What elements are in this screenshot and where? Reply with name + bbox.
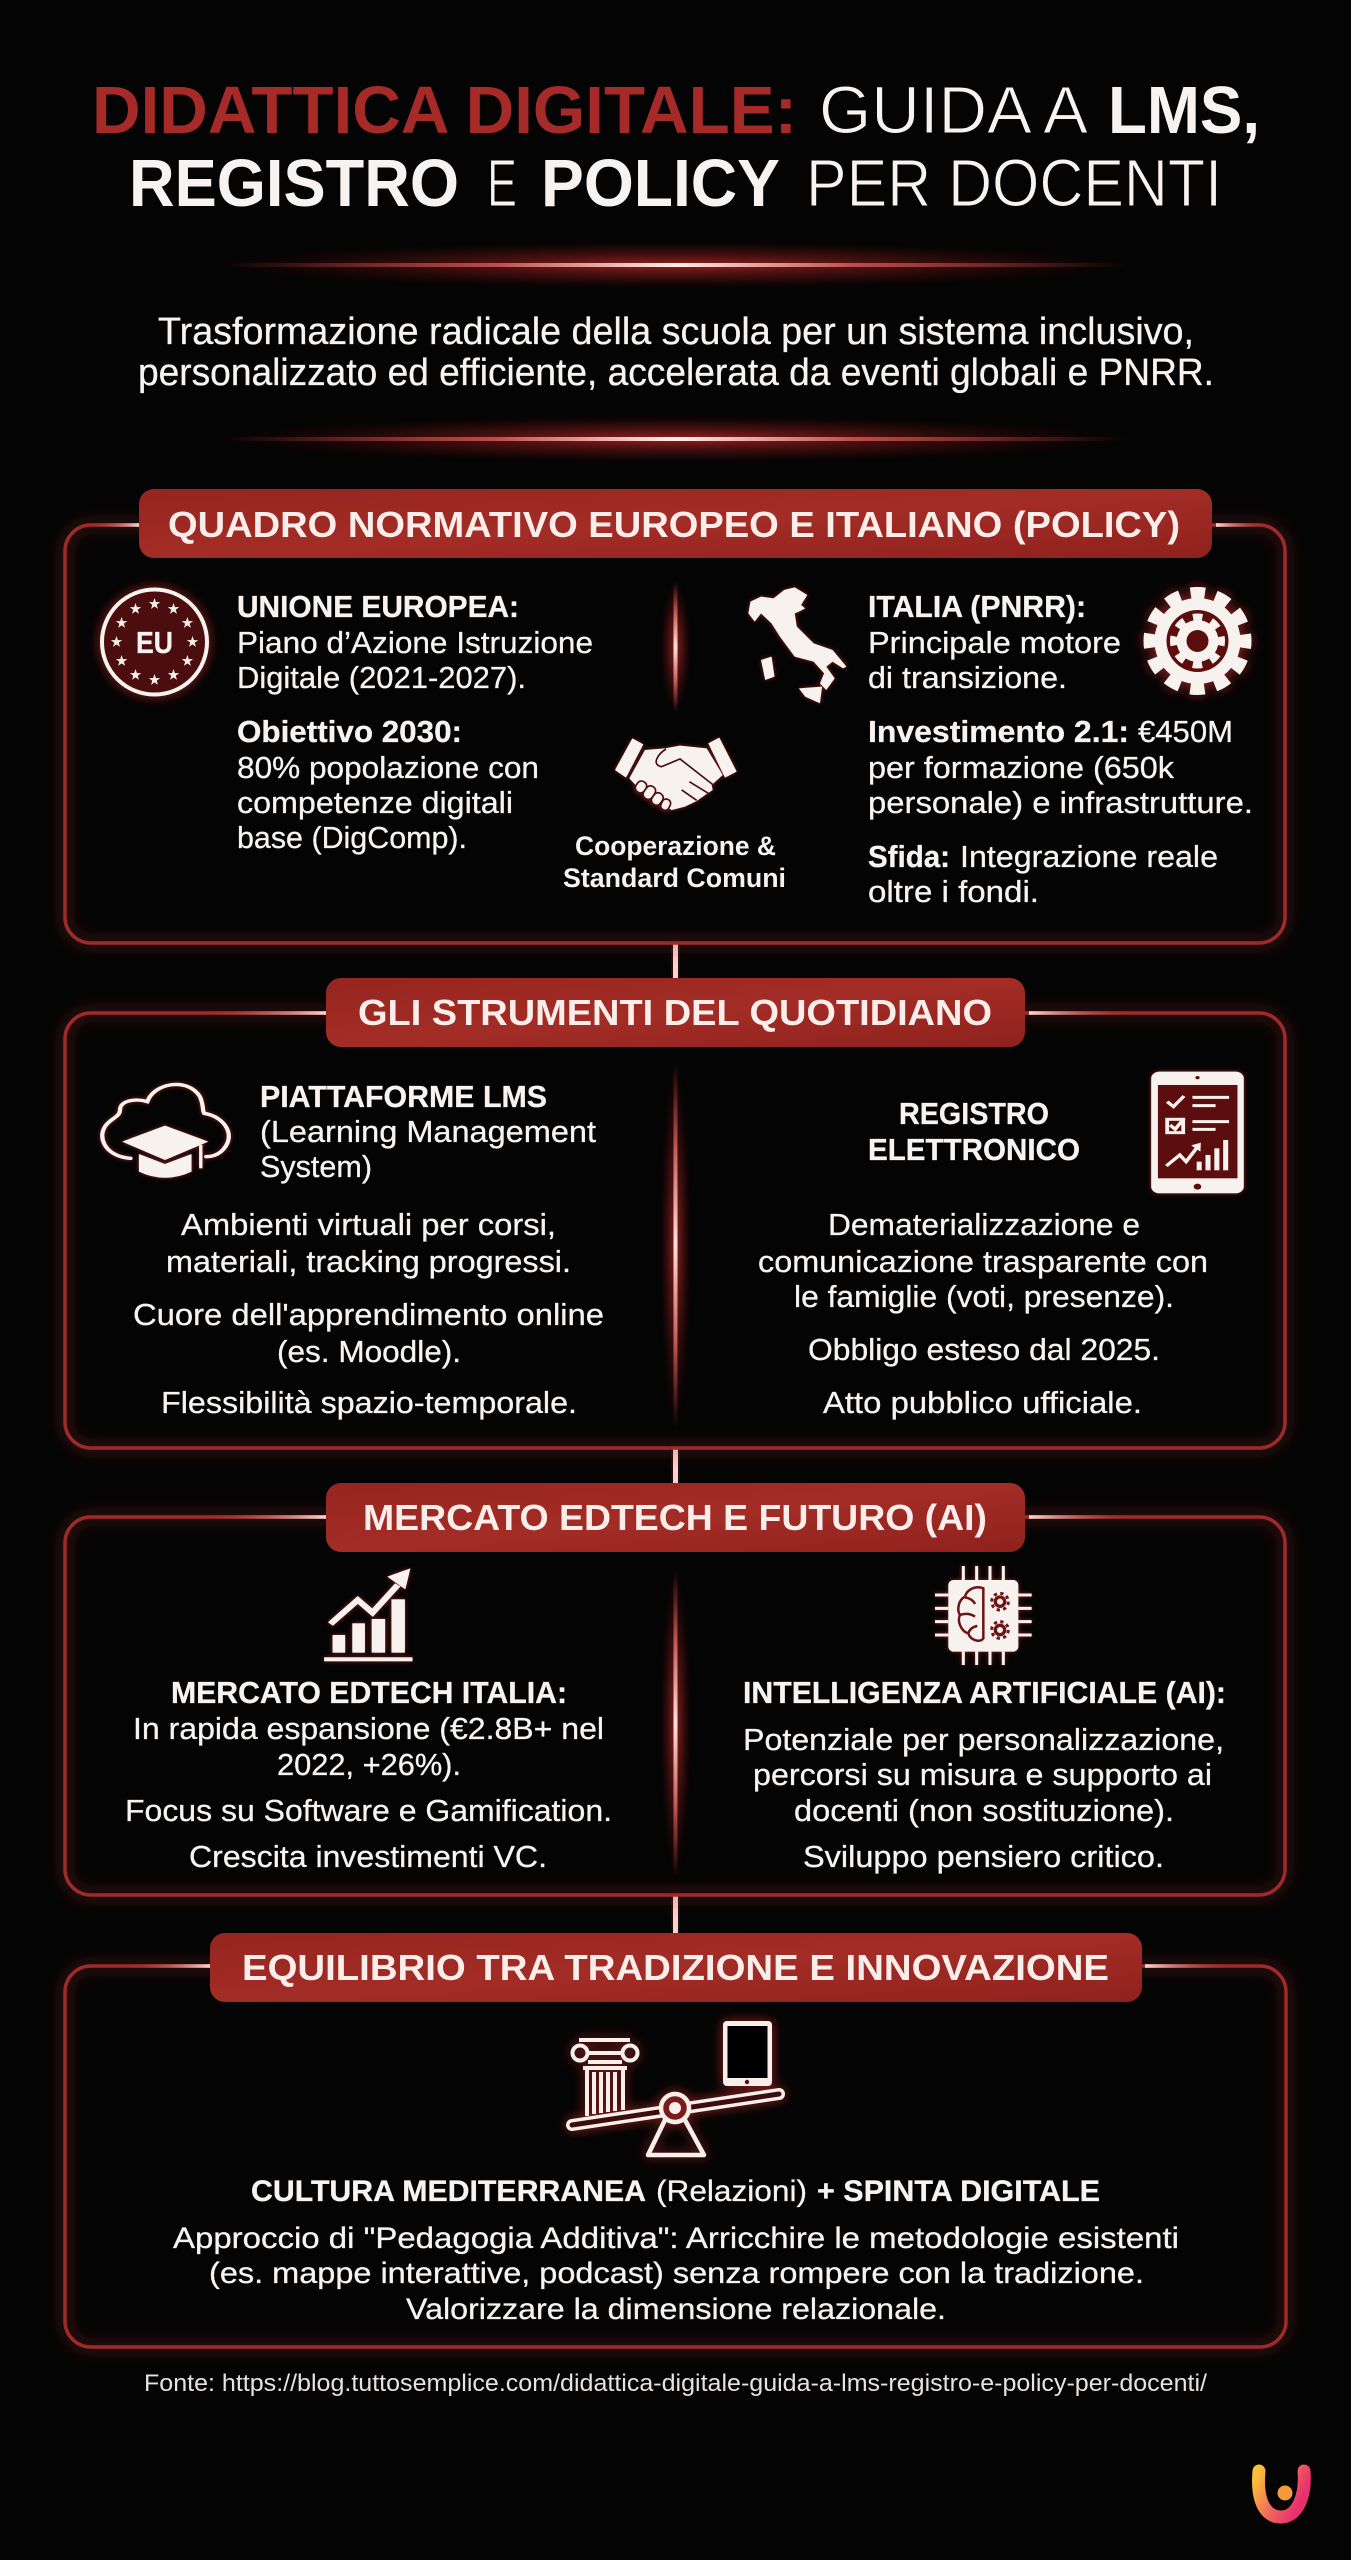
icon: cloud graduation cap [102,1084,229,1178]
text: italia pnrr: Sfida: [868,839,950,874]
text: mercato edtech italia [125,1675,612,1874]
icon: EU stars: EU [136,625,173,660]
text: mercato edtech italia: Crescita investimenti VC. [189,1839,547,1874]
title: GUIDA A [819,73,1088,148]
text: mercato edtech italia: MERCATO EDTECH ITALIA: [171,1675,567,1710]
text: italia pnrr: di transizione. [868,660,1067,695]
icon: gear [1150,594,1244,688]
heading: mercato [326,1483,1025,1552]
text: piattaforme lms: PIATTAFORME LMS [260,1079,547,1114]
text: registro elettronico: ELETTRONICO [868,1132,1080,1167]
text: unione europea: base (DigComp). [237,820,467,855]
text: registro elettronico: Atto pubblico ufficiale. [823,1385,1142,1420]
text: piattaforme lms: materiali, tracking progressi. [166,1244,571,1279]
text: registro elettronico: le famiglie (voti, presenze). [794,1279,1174,1314]
text: unione europea: 80% popolazione con [237,750,539,785]
text: piattaforme lms: System) [260,1149,372,1184]
icon: EU stars [102,590,207,694]
source: Fonte: https://blog.tuttosemplice.com/didattica-digitale-guida-a-lms-registro-e-policy-per-docenti/ [144,2370,1207,2397]
text: pedagogia additiva [173,2222,1179,2326]
icon: balance column and tablet [572,2021,779,2155]
heading: mercato: MERCATO EDTECH E FUTURO (AI) [363,1497,987,1538]
text: unione europea: Digitale (2021-2027). [237,660,526,695]
icon: italy map [748,587,846,703]
text: registro elettronico: Dematerializzazione e [828,1207,1140,1242]
text: piattaforme lms: Flessibilità spazio-temporale. [161,1385,577,1420]
text: registro elettronico: Obbligo esteso dal 2025. [808,1332,1160,1367]
heading: equilibrio [210,1933,1142,2002]
text: mercato edtech italia: 2022, +26%). [277,1747,461,1782]
panel: strumenti del quotidiano [65,978,1285,1448]
text: cultura mediterranea: + SPINTA DIGITALE [817,2175,1100,2208]
panel: quadro normativo [65,489,1285,943]
text: piattaforme lms: Ambienti virtuali per corsi, [181,1207,556,1242]
text: intelligenza artificiale: INTELLIGENZA ARTIFICIALE (AI): [743,1675,1226,1710]
text: cultura mediterranea: (Relazioni) [656,2175,807,2208]
text: unione europea: competenze digitali [237,785,513,820]
heading: strumenti: GLI STRUMENTI DEL QUOTIDIANO [358,992,992,1033]
title: POLICY [541,146,780,221]
text: unione europea: Obiettivo 2030: [237,714,462,749]
connector arrows between panels [673,942,678,1935]
text: italia pnrr: €450M [1138,714,1233,749]
text: italia pnrr: per formazione (650k [868,750,1175,785]
text: piattaforme lms [133,1079,604,1420]
text: registro elettronico: REGISTRO [899,1096,1049,1131]
label: cooperazione: Standard Comuni [563,863,786,893]
text: italia pnrr: Integrazione reale [960,839,1218,874]
text: cultura mediterranea [251,2175,1100,2208]
text: pedagogia additiva: Approccio di "Pedagogia Additiva": Arricchire le metodologie esistenti [173,2222,1179,2255]
text: intelligenza artificiale: Potenziale per personalizzazione, [743,1722,1224,1757]
subtitle [138,311,1214,394]
text: italia pnrr: personale) e infrastrutture. [868,785,1253,820]
panel: equilibrio tradizione innovazione [65,1933,1286,2347]
title: LMS, [1108,73,1260,148]
text: italia pnrr [868,589,1253,909]
text: piattaforme lms: Cuore dell'apprendimento online [133,1297,604,1332]
text: italia pnrr: oltre i fondi. [868,874,1039,909]
title: REGISTRO [129,146,459,221]
text: unione europea: UNIONE EUROPEA: [237,589,519,624]
heading: quadro normativo [139,489,1212,558]
text: pedagogia additiva: (es. mappe interattive, podcast) senza rompere con la tradizione. [209,2257,1144,2290]
text: pedagogia additiva: Valorizzare la dimensione relazionale. [406,2293,946,2326]
text: intelligenza artificiale: docenti (non sostituzione). [794,1793,1174,1828]
text: intelligenza artificiale [743,1675,1226,1874]
icon: handshake [615,738,737,812]
subtitle: personalizzato ed efficiente, accelerata da eventi globali e PNRR. [138,352,1214,394]
text: unione europea [237,589,593,855]
text: italia pnrr: ITALIA (PNRR): [868,589,1086,624]
title [92,73,1260,221]
icon: logo [1259,2471,1304,2517]
text: registro elettronico: comunicazione trasparente con [758,1244,1208,1279]
text: cultura mediterranea: CULTURA MEDITERRANEA [251,2175,646,2208]
icon: growth chart [324,1568,412,1661]
text: italia pnrr: Principale motore [868,625,1121,660]
heading: strumenti [326,978,1025,1047]
text: registro elettronico [758,1096,1208,1420]
subtitle: Trasformazione radicale della scuola per un sistema inclusivo, [158,311,1194,353]
text: italia pnrr: Investimento 2.1: [868,714,1129,749]
icon: tablet checklist [1151,1072,1244,1193]
heading: quadro normativo: QUADRO NORMATIVO EUROPEO E ITALIANO (POLICY) [168,504,1180,545]
panel: mercato edtech e futuro [65,1483,1285,1895]
text: mercato edtech italia: In rapida espansione (€2.8B+ nel [133,1711,604,1746]
text: intelligenza artificiale: percorsi su misura e supporto ai [753,1757,1212,1792]
heading: equilibrio: EQUILIBRIO TRA TRADIZIONE E INNOVAZIONE [242,1947,1109,1988]
text: piattaforme lms: (es. Moodle). [277,1334,461,1369]
title: E [487,146,517,221]
label: cooperazione: Cooperazione & [575,831,776,861]
text: piattaforme lms: (Learning Management [260,1114,596,1149]
text: unione europea: Piano d’Azione Istruzione [237,625,593,660]
label: cooperazione [563,831,786,893]
title: DIDATTICA DIGITALE: [92,73,797,148]
text: intelligenza artificiale: Sviluppo pensiero critico. [803,1839,1164,1874]
title: PER DOCENTI [806,146,1222,221]
text: mercato edtech italia: Focus su Software e Gamification. [125,1793,612,1828]
icon: AI chip [935,1566,1032,1665]
